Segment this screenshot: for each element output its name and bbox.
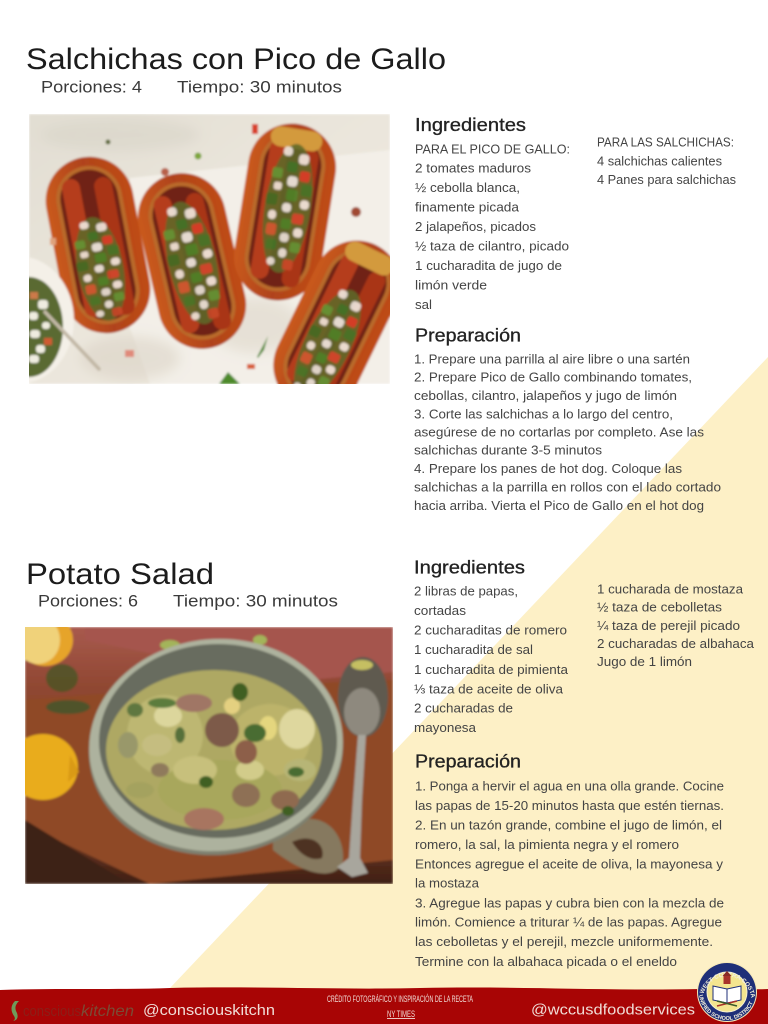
- ingredient list: pico de gallo: ½ taza de cilantro, picado: [415, 238, 569, 254]
- icon: West Contra Costa Unified School District seal: [697, 962, 757, 1022]
- preparation steps: recipe 1: cebollas, cilantro, jalapeños y jugo de limón: [414, 388, 677, 403]
- heading: Ingredientes recipe 1: Ingredientes: [415, 115, 526, 135]
- ingredient list: pico de gallo: 1 cucharadita de jugo de: [415, 258, 562, 273]
- heading: Preparación recipe 2: Preparación: [415, 752, 521, 772]
- ingredient list: salchichas: 4 salchichas calientes: [597, 154, 722, 169]
- servings and time: recipe 1: [41, 78, 342, 96]
- background: cream diagonal triangle: [170, 357, 768, 992]
- preparation steps: recipe 2: las cebolletas y el perejil, mezcle uniformemente.: [415, 934, 713, 949]
- ingredient list: potato salad column 1: 2 cucharaditas de romero: [414, 623, 567, 638]
- preparation steps: recipe 2: la mostaza: [415, 876, 480, 891]
- preparation steps: recipe 2: 1. Ponga a hervir el agua en una olla grande. Cocine: [415, 778, 724, 793]
- ingredient list: pico de gallo: [415, 141, 570, 312]
- ingredient list: potato salad column 2: Jugo de 1 limón: [597, 654, 692, 669]
- heading: Ingredientes recipe 2: Ingredientes: [414, 557, 525, 577]
- icon: West Contra Costa Unified School District seal: UNIFIED SCHOOL DISTRICT: [699, 994, 752, 1020]
- ingredient list: potato salad column 1: mayonesa: [414, 720, 477, 735]
- preparation steps: recipe 2: Termine con la albahaca picada o el eneldo: [415, 954, 677, 969]
- ingredient list: salchichas: PARA LAS SALCHICHAS:: [597, 135, 734, 150]
- preparation steps: recipe 1: 4. Prepare los panes de hot dog. Coloque las: [414, 461, 683, 476]
- footer credit: photo and recipe inspiration: [327, 994, 473, 1019]
- title: Potato Salad: Potato Salad: [26, 558, 214, 591]
- footer handle: conscious kitchen: @consciouskitchn: [143, 1002, 275, 1019]
- footer logo: conscious kitchen: [12, 1001, 134, 1021]
- ingredient list: pico de gallo: ½ cebolla blanca,: [415, 180, 520, 195]
- servings and time: recipe 2: Porciones: 6: [38, 592, 138, 610]
- ingredient list: potato salad column 1: cortadas: [414, 603, 467, 618]
- ingredient list: potato salad column 2: 1 cucharada de mostaza: [597, 581, 744, 596]
- ingredient list: potato salad column 1: ⅓ taza de aceite de oliva: [414, 681, 564, 696]
- ingredient list: potato salad column 1: [414, 584, 569, 735]
- footer logo: conscious kitchen: kitchen: [81, 1003, 134, 1020]
- preparation steps: recipe 1: hacia arriba. Vierta el Pico de Gallo en el hot dog: [414, 498, 704, 513]
- ingredient list: pico de gallo: PARA EL PICO DE GALLO:: [415, 141, 570, 156]
- ingredient list: potato salad column 1: 2 cucharadas de: [414, 701, 513, 716]
- preparation steps: recipe 2: 2. En un tazón grande, combine el jugo de limón, el: [415, 817, 722, 832]
- preparation steps: recipe 1: salchichas a la parrilla en rollos con el lado cortado: [414, 480, 721, 495]
- servings and time: recipe 2: [38, 592, 338, 610]
- footer logo: conscious kitchen: conscious: [23, 1003, 81, 1020]
- ingredient list: potato salad column 2: ¼ taza de perejil picado: [597, 618, 740, 633]
- footer credit: photo and recipe inspiration: CRÉDITO FOTOGRÁFICO Y INSPIRACIÓN DE LA RECETA: [327, 994, 473, 1004]
- preparation steps: recipe 1: [414, 351, 721, 513]
- title: Salchichas con Pico de Gallo: Salchichas con Pico de Gallo: [26, 43, 446, 76]
- preparation steps: recipe 2: limón. Comience a triturar ¼ de las papas. Agregue: [415, 915, 722, 930]
- preparation steps: recipe 2: 3. Agregue las papas y cubra bien con la mezcla de: [415, 895, 724, 910]
- preparation steps: recipe 1: asegúrese de no cortarlas por completo. Ase las: [414, 425, 705, 440]
- heading: Preparación recipe 1: Preparación: [415, 326, 521, 346]
- preparation steps: recipe 1: 1. Prepare una parrilla al aire libre o una sartén: [414, 351, 690, 366]
- footer band: red torn strip: [0, 987, 768, 1024]
- servings and time: recipe 2: Tiempo: 30 minutos: [173, 592, 338, 610]
- ingredient list: potato salad column 1: 2 libras de papas,: [414, 584, 518, 599]
- footer handle: wccusd food services: @wccusdfoodservices: [531, 1002, 695, 1018]
- servings and time: recipe 1: Tiempo: 30 minutos: [177, 78, 342, 96]
- preparation steps: recipe 2: Entonces agregue el aceite de oliva, la mayonesa y: [415, 856, 724, 871]
- ingredient list: pico de gallo: 2 jalapeños, picados: [415, 219, 537, 234]
- ingredient list: potato salad column 2: [597, 581, 755, 669]
- photo: hot dogs with pico de gallo: [29, 114, 390, 384]
- preparation steps: recipe 2: romero, la sal, la pimienta negra y el romero: [415, 837, 679, 852]
- footer credit: photo and recipe inspiration: NY TIMES: [387, 1009, 415, 1019]
- ingredient list: potato salad column 1: 1 cucharadita de pimienta: [414, 662, 569, 677]
- preparation steps: recipe 1: 3. Corte las salchichas a lo largo del centro,: [414, 406, 673, 421]
- preparation steps: recipe 1: 2. Prepare Pico de Gallo combinando tomates,: [414, 370, 692, 385]
- ingredient list: potato salad column 1: 1 cucharadita de sal: [414, 642, 533, 657]
- ingredient list: salchichas: [597, 135, 736, 187]
- ingredient list: salchichas: 4 Panes para salchichas: [597, 172, 736, 187]
- servings and time: recipe 1: Porciones: 4: [41, 78, 142, 96]
- ingredient list: potato salad column 2: ½ taza de cebolletas: [597, 599, 723, 614]
- ingredient list: pico de gallo: sal: [415, 297, 432, 312]
- ingredient list: pico de gallo: limón verde: [415, 278, 487, 292]
- preparation steps: recipe 2: [415, 778, 724, 969]
- ingredient list: potato salad column 2: 2 cucharadas de albahaca: [597, 636, 755, 651]
- ingredient list: pico de gallo: 2 tomates maduros: [415, 161, 532, 176]
- preparation steps: recipe 2: las papas de 15-20 minutos hasta que estén tiernas.: [415, 798, 724, 813]
- photo: potato salad in a bowl: [8, 614, 393, 884]
- icon: West Contra Costa Unified School District seal: WEST CONTRA COSTA: [700, 972, 756, 998]
- preparation steps: recipe 1: salchichas durante 3-5 minutos: [414, 442, 603, 458]
- ingredient list: pico de gallo: finamente picada: [415, 200, 520, 215]
